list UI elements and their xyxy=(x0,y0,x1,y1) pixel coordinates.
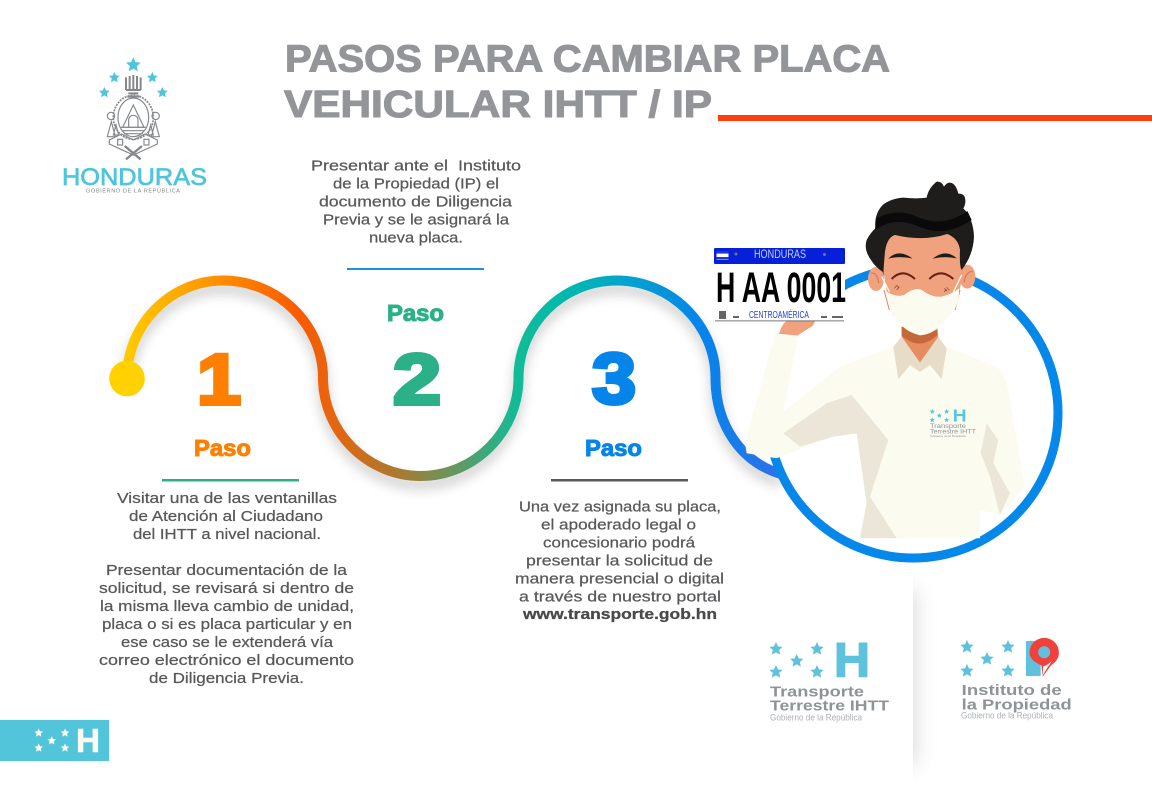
plate qr code xyxy=(719,311,726,319)
step 1 text block xyxy=(99,490,354,687)
logo: Transporte Terrestre IHTT: Terrestre IHTT xyxy=(770,698,889,715)
title: PASOS PARA CAMBIAR PLACA xyxy=(285,38,890,80)
title xyxy=(284,38,890,126)
step 3 text block: www.transporte.gob.hn xyxy=(522,606,717,623)
step 3 text block: Una vez asignada su placa, xyxy=(519,499,721,516)
neck xyxy=(902,327,938,363)
step 1 text block: de Diligencia Previa. xyxy=(149,670,304,687)
shirt logo: H xyxy=(953,406,967,426)
logo: Instituto de la Propiedad xyxy=(960,638,1072,720)
step 1 text block: ese caso se le extenderá vía xyxy=(121,634,334,651)
neck shadow xyxy=(902,327,937,343)
plate flag xyxy=(716,251,728,260)
step 1 text block: de Atención al Ciudadano xyxy=(129,508,323,525)
plate background xyxy=(714,248,845,321)
step 3 divider xyxy=(551,479,688,482)
plate country: HONDURAS xyxy=(754,247,806,261)
step 3 text block: concesionario podrá xyxy=(543,535,696,552)
step 1 text block: la misma lleva cambio de unidad, xyxy=(100,598,354,615)
cheek marks xyxy=(894,285,949,292)
step 3 label: Paso xyxy=(585,435,642,461)
step 1 text block: solicitud, se revisará si dentro de xyxy=(99,580,354,597)
hair highlight xyxy=(875,211,972,231)
logo: Instituto de la Propiedad: la Propiedad xyxy=(962,696,1072,713)
mask straps xyxy=(882,275,962,292)
bottom left badge: H xyxy=(76,722,100,759)
shirt xyxy=(745,333,1025,538)
step 1 text block: correo electrónico el documento xyxy=(99,652,354,669)
bottom left badge xyxy=(0,720,109,761)
logo: Transporte Terrestre IHTT: Transporte xyxy=(770,684,864,701)
step 3 text block xyxy=(515,499,724,623)
ears xyxy=(868,265,975,291)
icon: stars xyxy=(99,57,168,97)
closed eyes xyxy=(892,273,953,279)
title: VEHICULAR IHTT / IP xyxy=(284,84,712,126)
icon: shield xyxy=(107,75,159,159)
shirt logo xyxy=(930,406,976,438)
step 1 text block: placa o si es placa particular y en xyxy=(102,616,352,633)
hair xyxy=(866,182,974,272)
plate number: H AA 0001 xyxy=(716,264,846,312)
collar xyxy=(893,337,947,379)
character illustration xyxy=(745,182,1025,538)
shirt logo: Gobierno de la República xyxy=(930,434,967,438)
logo: Transporte Terrestre IHTT xyxy=(769,634,889,722)
plate header xyxy=(714,248,845,264)
character circle xyxy=(768,268,1058,558)
logo: Honduras coat of arms xyxy=(62,57,207,195)
face xyxy=(883,233,963,315)
logo: Transporte Terrestre IHTT: H xyxy=(834,634,870,688)
shirt shadows xyxy=(783,395,1010,538)
wave start dot xyxy=(109,361,145,396)
logo: Transporte Terrestre IHTT: Gobierno de la República xyxy=(770,712,862,722)
step 3 text block: a través de nuestro portal xyxy=(519,589,721,606)
panel shadow bottom right xyxy=(913,586,923,768)
step 2 text block: nueva placa. xyxy=(369,230,463,247)
wordmark: HONDURAS xyxy=(62,164,207,191)
face mask xyxy=(887,288,959,335)
plate region: CENTROAMÉRICA xyxy=(749,308,809,321)
step 3 text block: presentar la solicitud de xyxy=(526,553,713,570)
step 1 text block: Visitar una de las ventanillas xyxy=(117,490,337,507)
shirt logo: Transporte xyxy=(930,423,967,430)
step 2 divider xyxy=(347,268,484,270)
eyebrows xyxy=(888,253,957,259)
step 3 number: 3 xyxy=(592,340,636,419)
step 2 text block: Previa y se le asignará la xyxy=(323,212,510,229)
step 1 text block: del IHTT a nivel nacional. xyxy=(133,526,321,543)
logo: Honduras coat of arms: GOBIERNO DE LA REPÚBLICA xyxy=(86,188,180,195)
step 2 text block: Presentar ante el Instituto xyxy=(311,158,521,175)
icon: map pin xyxy=(1030,638,1059,676)
logo: Instituto de la Propiedad: Gobierno de la República xyxy=(961,710,1053,720)
step 1 text block: Presentar documentación de la xyxy=(106,562,348,579)
step 2 text block: documento de Diligencia xyxy=(319,194,513,211)
logo: Instituto de la Propiedad: Instituto de xyxy=(962,682,1062,699)
shirt logo: Terrestre IHTT xyxy=(930,429,976,436)
wave path xyxy=(127,280,781,476)
step 1 number: 1 xyxy=(197,341,241,420)
step 2 number: 2 xyxy=(393,341,441,420)
wave shadow xyxy=(127,288,781,484)
step 3 text block: manera presencial o digital xyxy=(515,571,724,588)
step 1 label: Paso xyxy=(194,435,251,461)
step 2 label: Paso xyxy=(387,300,444,326)
step 2 text block: de la Propiedad (IP) el xyxy=(333,176,499,193)
hand xyxy=(777,317,815,336)
license plate xyxy=(714,247,846,321)
step 2 text block xyxy=(311,158,521,247)
step 1 divider xyxy=(162,479,299,482)
step 3 text block: el apoderado legal o xyxy=(541,517,696,534)
title accent line xyxy=(718,115,1152,121)
